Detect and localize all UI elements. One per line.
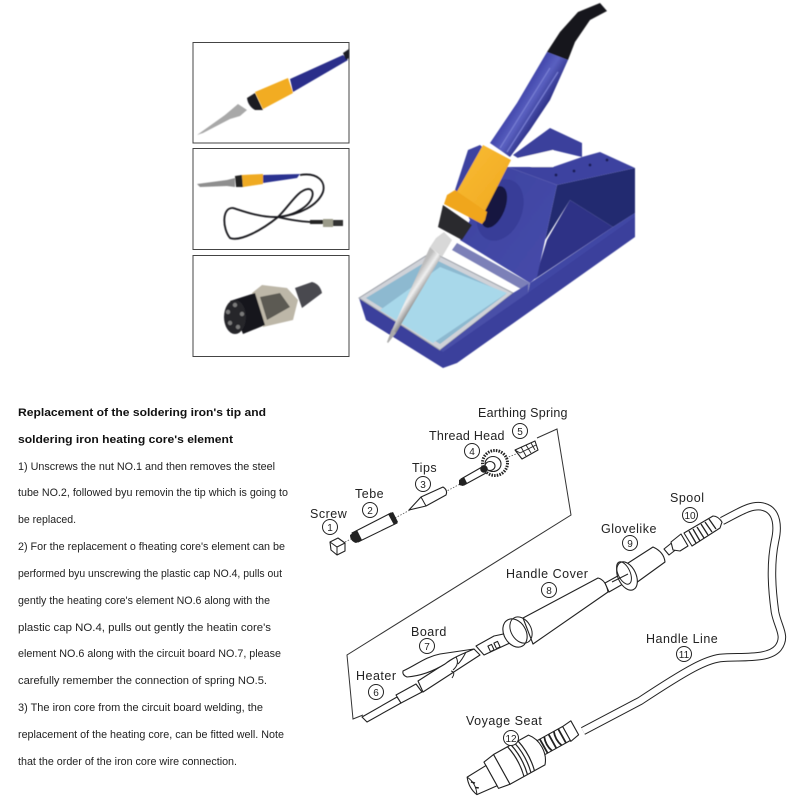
label: Voyage Seat: Voyage Seat [466,714,542,728]
panel: connector plug photo [193,256,349,356]
icon: cable end [343,49,349,60]
callout: number 5: 5 [517,427,523,438]
icon: tip and collar [197,178,235,187]
text block: replacement instructions: plastic cap NO.4, pulls out gently the heatin core's [18,622,272,634]
label: Glovelike: Glovelike [601,522,657,536]
icon: handle line cable [583,506,782,731]
label: Heater: Heater [356,669,397,683]
label: Tips: Tips [412,461,437,475]
icon: thread head part [459,450,508,486]
callout: number 4: 4 [469,447,475,458]
text block: replacement instructions: that the order of the iron core wire connection. [18,756,237,768]
callout: number 9: 9 [627,539,633,550]
icon: tube part [350,512,398,543]
callout: number 2: 2 [367,506,373,517]
icon: glovelike part [605,547,665,593]
heading: Replacement of the soldering iron's tip and [18,407,266,419]
icon: iron tip [387,329,396,343]
icon: plug [310,220,323,224]
callout: number 5 [512,424,528,438]
icon: yellow grip [255,78,293,109]
callout: number 3: 3 [420,480,426,491]
icon: floor of stand [535,200,613,279]
center axis [345,454,516,542]
callout: number 9 [622,536,638,550]
icon: base side [359,213,635,368]
callout: number 2 [362,502,378,518]
callout: number 10: 10 [684,511,696,522]
callout: number 1 [322,520,338,534]
callout: number 12: 12 [505,734,517,745]
callout: number 3 [416,476,430,492]
text block: replacement instructions: 1) Unscrews the nut NO.1 and then removes the steel [18,461,275,473]
icon: spring part [515,441,538,459]
label: Earthing Spring: Earthing Spring [478,406,568,420]
callout: number 4 [464,444,480,458]
icon: voyage seat connector [462,714,583,800]
callout: number 1: 1 [327,523,333,534]
callout: number 12 [504,730,518,746]
label: Tebe: Tebe [355,487,384,501]
text block: replacement instructions: replacement of the heating core, can be fitted well. Note [18,729,284,741]
label: Board: Board [411,625,447,639]
callout: number 6: 6 [373,688,379,699]
callout: number 8 [542,582,556,598]
heading [18,407,266,446]
icon: black collar [438,205,472,240]
label: Spool: Spool [670,491,704,505]
icon: iron tip [197,104,247,135]
icon: socket pin holes [226,303,244,329]
icon: yellow grip [242,174,263,187]
callout: number 11 [676,646,692,662]
icon: blue sponge [380,267,507,343]
callout: number 6 [368,684,384,700]
icon: base top ledge [528,213,635,293]
icon: corrugated cable sleeve [547,3,607,60]
icon: blue handle [290,55,348,92]
label: Thread Head: Thread Head [429,429,505,443]
callout: number 8: 8 [546,586,552,597]
text block: replacement instructions [18,407,288,768]
icon: stand front body [455,145,557,283]
callout: number 10 [682,508,698,522]
callout: number 11: 11 [679,650,690,661]
icon: iron holder ring [468,172,532,248]
icon: board part [403,633,512,692]
icon: handle cover part [498,578,608,651]
exploded diagram [310,406,782,800]
icon: heater part [362,684,422,722]
text block: replacement instructions: carefully remember the connection of spring NO.5. [18,675,267,687]
label: Screw: Screw [310,507,348,521]
illustration: soldering station [359,3,635,368]
icon: coiled black cable [224,174,324,239]
icon: blue handle [490,52,568,157]
icon: silver tube [392,247,441,333]
icon: stand top plate [508,152,635,185]
text block: replacement instructions: be replaced. [18,514,76,526]
icon: blue handle [263,174,300,183]
callout: number 7 [420,638,434,654]
label: Handle Cover: Handle Cover [506,567,588,581]
icon: stand interior [545,168,635,240]
icon: black socket [230,293,265,334]
text block: replacement instructions: 3) The iron core from the circuit board welding, the [18,702,263,714]
text block: replacement instructions: performed byu unscrewing the plastic cap NO.4, pulls out [18,568,282,580]
icon: metal collar [252,285,298,327]
icon: silver sill [452,243,530,293]
text block: replacement instructions: gently the heating core's element NO.6 along with the [18,595,270,607]
icon: top plate mounting holes [554,158,608,176]
text block: replacement instructions: element NO.6 along with the circuit board NO.7, please [18,648,281,660]
icon: yellow grip [455,145,511,213]
text block: replacement instructions: tube NO.2, followed byu removin the tip which is going to [18,487,288,499]
icon: sponge tray rim [359,252,513,350]
label: Handle Line: Handle Line [646,632,718,646]
icon: tip part [409,487,447,510]
callout: number 7: 7 [424,642,430,653]
bracket frame [347,429,571,719]
heading: soldering iron heating core's element [18,434,233,446]
text block: replacement instructions: 2) For the replacement o fheating core's element can be [18,541,285,553]
icon: spool part [664,516,722,555]
panel: iron with cable photo [193,148,349,250]
icon: stand rear wing [513,128,582,158]
icon: grip ridge [444,190,487,224]
icon: rubber boot [295,282,322,308]
icon: black collar [247,93,263,110]
panel: soldering iron close-up photo [193,42,349,143]
icon: gap between stand wings [518,150,553,167]
icon: screw part [330,538,345,555]
